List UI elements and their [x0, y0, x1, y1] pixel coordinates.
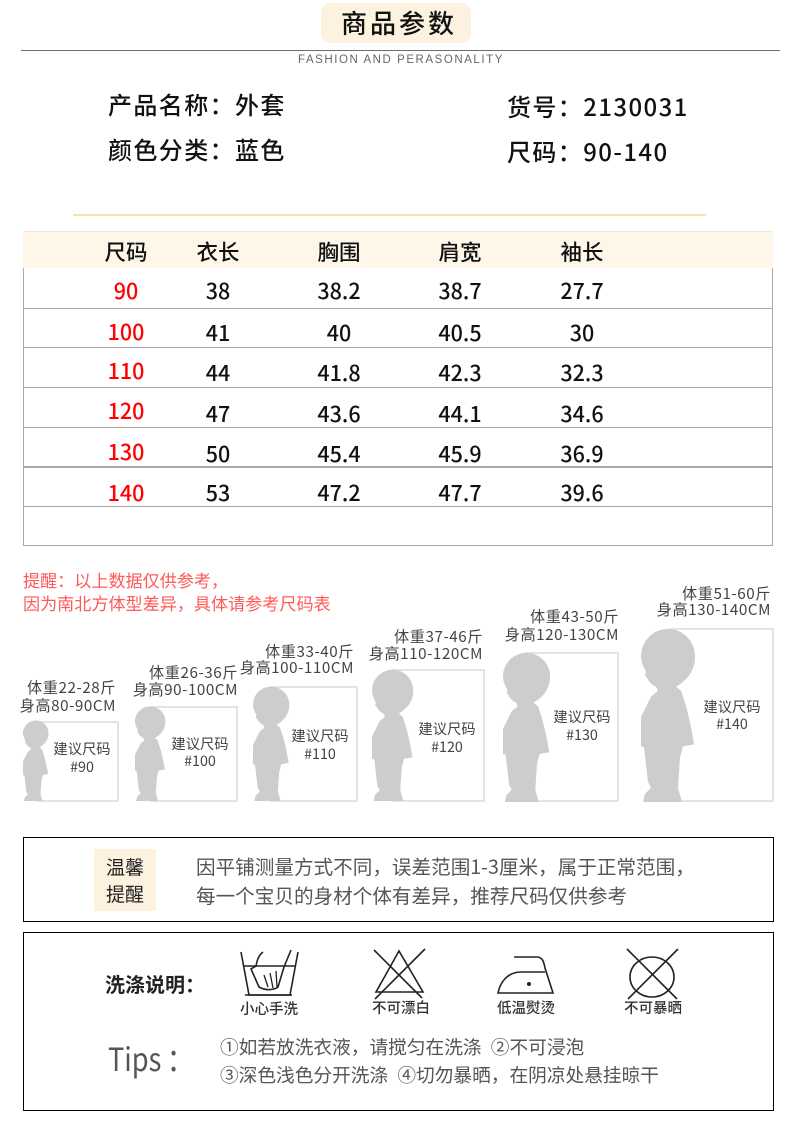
panel: warm reminder: [23, 837, 774, 922]
size guide: 110: 建议尺码: [291, 725, 349, 746]
size guide: 110: [240, 640, 358, 802]
tips label: Tips ：: [108, 1035, 194, 1081]
panel: washing instructions: [23, 932, 774, 1111]
size range: 尺码：90-140: [507, 133, 669, 168]
row: size 110: [23, 348, 773, 388]
tips line 2: ③深色浅色分开洗涤 ④切勿暴晒，在阴凉处悬挂晾干: [220, 1061, 659, 1088]
row: size 100: 30: [570, 317, 594, 348]
table header: 胸围: [317, 236, 360, 267]
size guide: 110: #110: [304, 743, 336, 764]
row: size 120: 34.6: [560, 398, 604, 429]
row: size 110: 32.3: [560, 357, 604, 388]
size guide: 130: [503, 605, 619, 802]
row: size 140: [23, 468, 773, 507]
size guide: 90: [20, 676, 119, 802]
row: size 130: 130: [108, 436, 144, 467]
size guide: 100: 建议尺码: [171, 733, 229, 754]
size table: [23, 231, 773, 546]
size guide: 140: 身高130-140CM: [657, 598, 771, 620]
icon: hand wash: 小心手洗: [240, 998, 298, 1019]
icon: no bleach: 不可漂白: [372, 997, 430, 1018]
reminder text line 2: 每一个宝贝的身材个体有差异，推荐尺码仅供参考: [196, 880, 627, 909]
heading rule: [21, 50, 780, 51]
reminder tag: 温馨 提醒: [106, 853, 144, 907]
row: size 90: 38.2: [317, 275, 361, 306]
row: size 130: 50: [206, 438, 230, 469]
size guide: 120: [369, 625, 485, 802]
row: size 90: 38.7: [438, 275, 482, 306]
washing heading: 洗涤说明：: [105, 969, 205, 998]
size guide: 90: 建议尺码: [53, 738, 111, 759]
subtitle: FASHION AND PERASONALITY: [298, 54, 504, 66]
row: size 100: 41: [206, 317, 230, 348]
row: size 130: 45.9: [438, 438, 482, 469]
table header: 袖长: [560, 236, 604, 267]
row: size 90: 90: [114, 275, 138, 306]
title badge: 商品参数: [341, 4, 457, 41]
row: size 110: 44: [206, 357, 230, 388]
size guide: 110: 身高100-110CM: [240, 656, 354, 678]
icon: no sun exposure: [624, 948, 682, 1018]
item number: 货号：2130031: [507, 88, 689, 123]
row: size 110: 42.3: [438, 357, 482, 388]
row: size 130: [23, 428, 773, 468]
size guide: 90: 身高80-90CM: [20, 694, 116, 716]
row: size 90: 38: [206, 275, 230, 306]
icon: no sun exposure: 不可暴晒: [624, 997, 682, 1018]
row: size 130: 45.4: [317, 438, 361, 469]
size guide: 130: 身高120-130CM: [505, 623, 619, 645]
size guide: 130: #130: [566, 724, 598, 745]
row: size 140: 140: [108, 477, 144, 508]
row: size 140: 53: [206, 477, 230, 508]
row: size 140: 39.6: [560, 477, 604, 508]
size guide: 120: 建议尺码: [418, 718, 476, 739]
size guide: 110: 体重33-40斤: [265, 640, 354, 662]
size guide: 120: #120: [431, 736, 463, 757]
empty row: [23, 507, 773, 546]
size guide: 140: 建议尺码: [703, 696, 761, 717]
size guide: 100: 身高90-100CM: [133, 678, 238, 700]
row: size 100: [23, 309, 773, 348]
row: size 120: 43.6: [317, 398, 361, 429]
table header: [23, 231, 773, 268]
product name: 产品名称：外套: [108, 86, 286, 121]
row: size 140: 47.7: [438, 477, 482, 508]
row: size 100: 100: [108, 316, 144, 347]
size guide: 140: #140: [716, 713, 748, 734]
tips line 1: ①如若放洗衣液，请搅匀在洗涤 ②不可浸泡: [220, 1033, 584, 1060]
reminder text line 1: 因平铺测量方式不同，误差范围1-3厘米，属于正常范围，: [196, 851, 695, 880]
icon: no bleach: [372, 948, 430, 1018]
table header: 衣长: [196, 236, 240, 267]
size guide: 120: 身高110-120CM: [369, 642, 483, 664]
row: size 100: 40.5: [438, 317, 482, 348]
row: size 110: 41.8: [317, 357, 361, 388]
row: size 140: 47.2: [317, 477, 361, 508]
table header: 尺码: [104, 236, 148, 267]
reminder tag: [94, 849, 156, 911]
row: size 120: 120: [108, 395, 144, 426]
size guide: 140: [641, 582, 774, 802]
size guide: 130: 体重43-50斤: [530, 605, 619, 627]
size guide: 140: 体重51-60斤: [682, 582, 771, 604]
row: size 130: 36.9: [560, 438, 604, 469]
cream divider: [73, 214, 706, 216]
row: size 120: [23, 388, 773, 428]
size guide: 90: 体重22-28斤: [27, 676, 116, 698]
colour: 颜色分类：蓝色: [108, 131, 286, 166]
size guide: 130: 建议尺码: [553, 706, 611, 727]
row: size 90: 27.7: [560, 275, 604, 306]
table header: 肩宽: [438, 236, 482, 267]
row: size 120: 47: [206, 398, 230, 429]
row: size 90: [23, 268, 773, 309]
icon: low temperature iron: [497, 956, 555, 1018]
size guide: 90: #90: [70, 756, 94, 777]
size guide: 120: 体重37-46斤: [394, 625, 483, 647]
red reminder: 提醒：以上数据仅供参考， 因为南北方体型差异，具体请参考尺码表: [23, 567, 331, 615]
row: size 110: 110: [108, 355, 144, 386]
row: size 100: 40: [327, 317, 351, 348]
size guide: 100: #100: [184, 750, 216, 771]
icon: low temperature iron: 低温熨烫: [497, 997, 555, 1018]
row: size 120: 44.1: [438, 398, 482, 429]
size guide: 100: [133, 661, 238, 802]
icon: hand wash: [240, 950, 299, 1019]
size guide: 100: 体重26-36斤: [149, 661, 238, 683]
